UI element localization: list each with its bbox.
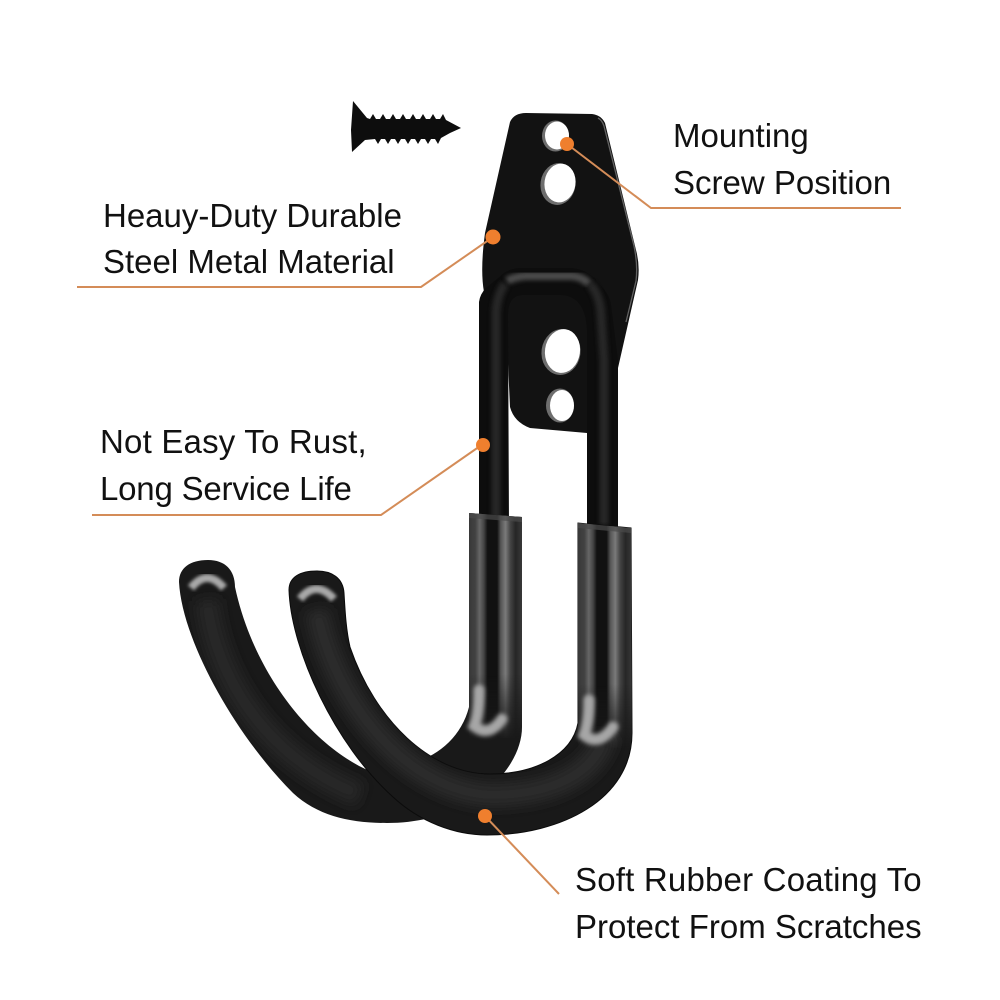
label text: Steel Metal Material bbox=[103, 243, 395, 280]
label text: Not Easy To Rust, bbox=[100, 423, 367, 460]
hole: upper screw slot bbox=[542, 120, 569, 152]
label text: Protect From Scratches bbox=[575, 908, 922, 945]
front hook bbox=[289, 513, 632, 835]
label text: Heauy-Duty Durable bbox=[103, 197, 402, 234]
leader line: steel material bbox=[77, 237, 493, 287]
back hook bbox=[179, 513, 522, 823]
mounting plate bbox=[482, 113, 639, 436]
icon: mounting screw bbox=[351, 101, 461, 152]
label text: Long Service Life bbox=[100, 470, 352, 507]
body sheen: front hook bbox=[317, 610, 605, 795]
marker dot bbox=[560, 137, 574, 151]
leader line: mounting screw bbox=[567, 144, 901, 208]
leader line: rust resistance bbox=[92, 444, 483, 515]
bend highlight: front hook bbox=[584, 700, 613, 740]
callout: steel material bbox=[77, 197, 500, 287]
marker dot bbox=[478, 809, 492, 823]
wire side highlights bbox=[496, 284, 604, 525]
wire top highlight bbox=[507, 276, 589, 284]
sleeve collars bbox=[469, 513, 631, 533]
hole: fourth plate hole bbox=[546, 388, 574, 422]
marker dot bbox=[486, 230, 500, 244]
sleeve shading: back hook bbox=[469, 513, 522, 738]
tip highlight: front hook bbox=[300, 589, 334, 599]
hole: second plate hole bbox=[538, 161, 578, 207]
bend highlight: back hook bbox=[474, 690, 502, 731]
callout: rubber coating bbox=[478, 809, 922, 945]
hole: third plate hole bbox=[538, 327, 584, 377]
leader line: rubber coating bbox=[485, 816, 559, 894]
marker dot bbox=[476, 438, 490, 452]
callout: mounting screw position bbox=[560, 117, 901, 208]
tip highlight: back hook bbox=[191, 578, 224, 588]
label text: Mounting bbox=[673, 117, 809, 154]
label text bbox=[575, 861, 922, 945]
body sheen: back hook bbox=[207, 600, 360, 795]
label text bbox=[673, 117, 891, 201]
callout: rust resistance bbox=[92, 423, 490, 515]
U-shaped steel wire bbox=[479, 268, 618, 540]
label text bbox=[100, 423, 367, 507]
label text: Screw Position bbox=[673, 164, 891, 201]
sleeve shading: front hook bbox=[578, 523, 632, 748]
label text bbox=[103, 197, 402, 280]
label text: Soft Rubber Coating To bbox=[575, 861, 922, 898]
